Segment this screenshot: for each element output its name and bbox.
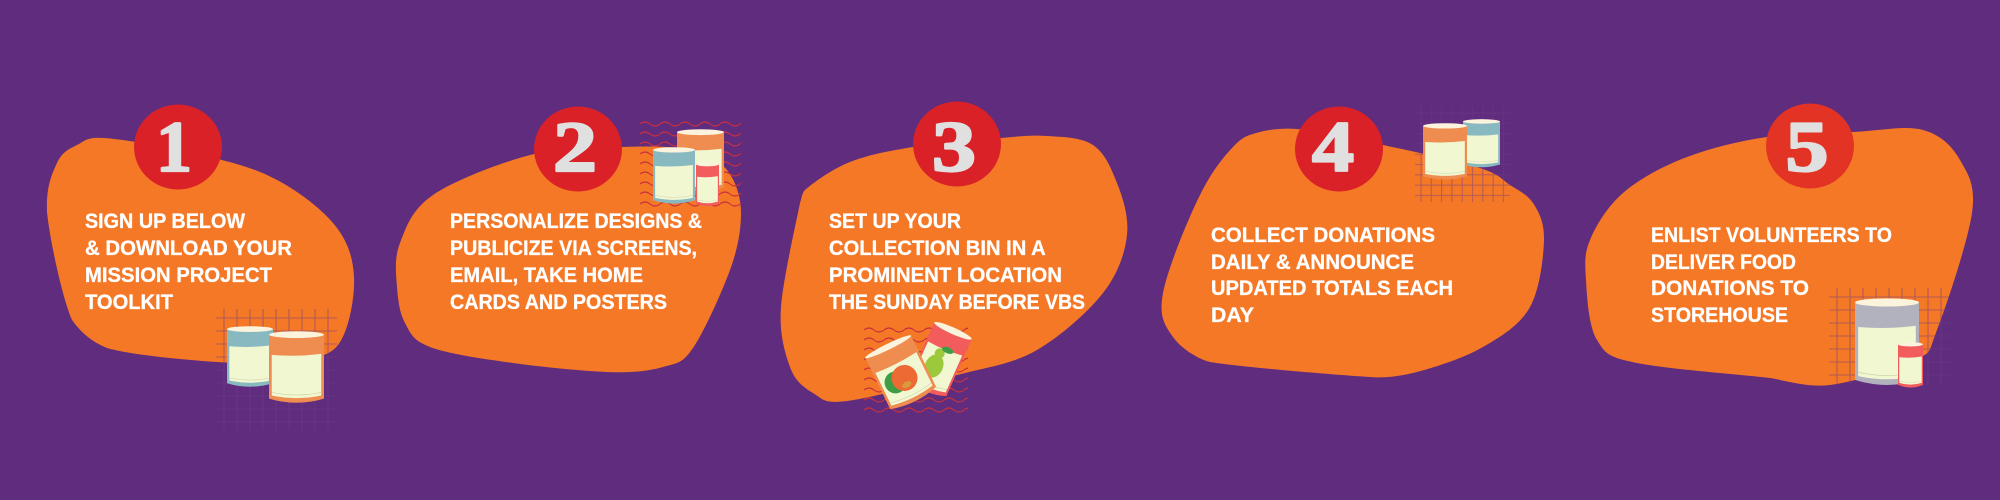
text: step 3: PROMINENT LOCATION [829, 264, 1062, 287]
number badge 1: 1 [156, 107, 192, 187]
grid pattern 5 [1829, 288, 1950, 385]
wave pattern 2 [640, 119, 741, 209]
orange blob 3 [781, 136, 1127, 402]
text: step 1: & DOWNLOAD YOUR [85, 237, 292, 260]
icon: cans 4 [1423, 119, 1500, 180]
icon: tilted cans 3 [864, 319, 973, 413]
text: step 5: DELIVER FOOD [1651, 251, 1796, 274]
wave pattern 3 [864, 325, 968, 415]
text: step 4: DAY [1211, 304, 1254, 327]
text: step 1: MISSION PROJECT [85, 264, 272, 287]
orange blob 1 [47, 138, 354, 363]
text: step 4: UPDATED TOTALS EACH [1211, 277, 1453, 300]
icon: apple [880, 361, 922, 399]
text: step 1: SIGN UP BELOW [85, 210, 245, 233]
icon: pear [921, 341, 954, 382]
number badge 1 [134, 104, 222, 190]
text: step 2: PUBLICIZE VIA SCREENS, [450, 237, 697, 260]
number badge 2: 2 [553, 107, 597, 187]
text: step 3: SET UP YOUR [829, 210, 961, 233]
icon: cans 5 [1855, 298, 1923, 388]
text: step 2: PERSONALIZE DESIGNS & [450, 210, 702, 233]
panel: step 2 [396, 106, 741, 372]
text: step 5: STOREHOUSE [1651, 304, 1788, 327]
text: step 2: EMAIL, TAKE HOME [450, 264, 643, 287]
orange blob 2 [396, 146, 741, 372]
text: step 4: COLLECT DONATIONS [1211, 224, 1435, 247]
text: step 4: DAILY & ANNOUNCE [1211, 251, 1414, 274]
orange blob 5 [1585, 128, 1973, 386]
grid pattern 4 [1415, 107, 1510, 202]
text: step 3: THE SUNDAY BEFORE VBS [829, 291, 1085, 314]
text: step 2: CARDS AND POSTERS [450, 291, 667, 314]
text: step 5: ENLIST VOLUNTEERS TO [1651, 224, 1892, 247]
text: step 1: TOOLKIT [85, 291, 173, 314]
number badge 5 [1766, 104, 1854, 188]
panel: step 3 [781, 102, 1127, 415]
number badge 3 [913, 102, 1001, 187]
number badge 3: 3 [932, 107, 976, 187]
panel: step 1 [47, 104, 354, 430]
number badge 4 [1295, 106, 1383, 192]
panel: step 4 [1162, 106, 1544, 377]
number badge 2 [534, 106, 622, 192]
text: step 3: COLLECTION BIN IN A [829, 237, 1046, 260]
number badge 5: 5 [1786, 107, 1828, 187]
orange blob 4 [1162, 129, 1544, 377]
icon: cans 1 [227, 326, 324, 403]
panel: step 5 [1585, 104, 1973, 388]
grid pattern 1 [216, 309, 337, 430]
icon: cans 2 [653, 129, 724, 206]
number badge 4: 4 [1312, 107, 1354, 187]
text: step 5: DONATIONS TO [1651, 277, 1809, 300]
